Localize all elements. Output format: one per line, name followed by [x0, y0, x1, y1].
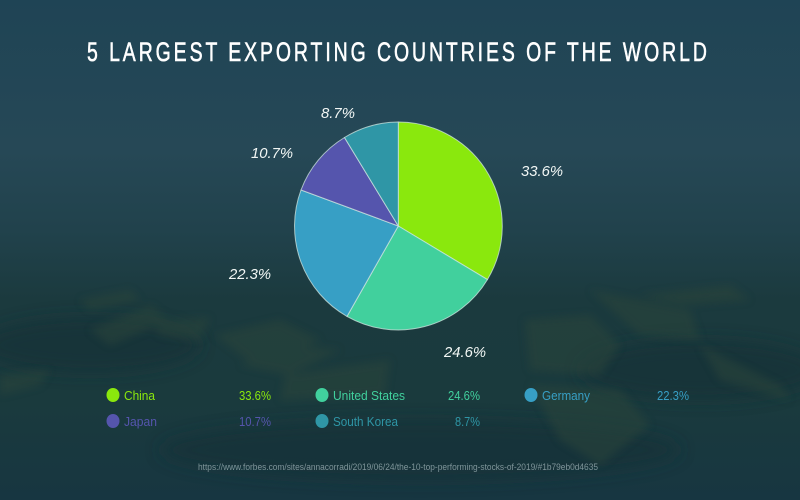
legend item: China: China [124, 388, 156, 403]
legend item: United States: United States [333, 388, 405, 403]
pie chart [295, 122, 502, 330]
slice: China 33.6% [398, 122, 502, 280]
legend item: China [106, 388, 271, 403]
legend item: Germany [524, 388, 689, 403]
data label: 22.3%: 22.3% [228, 266, 271, 283]
data label: 33.6%: 33.6% [521, 163, 563, 180]
title: 5 LARGEST EXPORTING COUNTRIES OF THE WORLD [87, 37, 707, 67]
data label: 10.7%: 10.7% [251, 145, 293, 162]
slice: Japan 10.7% [301, 138, 398, 226]
slice: Germany 22.3% [295, 190, 398, 316]
legend item: Japan [106, 414, 271, 429]
legend item: South Korea: 8.7% [455, 414, 480, 429]
legend item: United States [316, 388, 480, 403]
legend item: United States: 24.6% [448, 388, 480, 403]
legend item: Japan: 10.7% [239, 414, 271, 429]
legend item: Germany: 22.3% [657, 388, 689, 403]
legend item: Japan: Japan [124, 414, 157, 429]
slice: South Korea 8.7% [344, 122, 398, 226]
data label: 8.7%: 8.7% [321, 105, 355, 122]
legend item: South Korea: South Korea [333, 414, 399, 429]
legend item: China: 33.6% [239, 388, 271, 403]
legend item: Germany: Germany [542, 388, 590, 403]
legend [106, 388, 689, 429]
legend item: South Korea [316, 414, 480, 429]
data label: 24.6%: 24.6% [443, 344, 486, 361]
slice: United States 24.6% [347, 226, 487, 330]
source url: https://www.forbes.com/sites/annacorradi/2019/06/24/the-10-top-performing-stocks-of-2019/#1b79eb0d4635 [198, 462, 598, 472]
